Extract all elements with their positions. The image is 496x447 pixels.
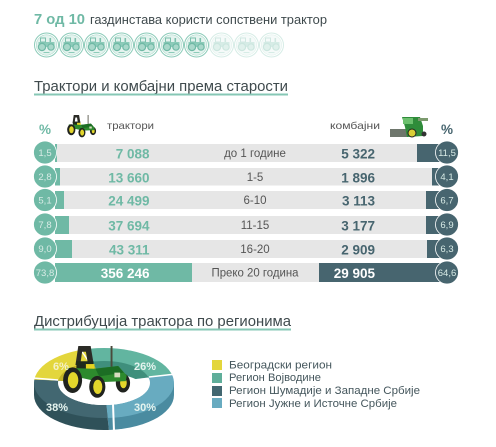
row: up to 1 year: 1,5	[38, 148, 52, 159]
row: up to 1 year: 5 322	[341, 146, 375, 162]
tractor illustration	[63, 346, 130, 398]
row: 6-10 years: 3 113	[342, 194, 375, 208]
row: 16-20 years	[34, 237, 458, 260]
row: 16-20 years: 2 909	[341, 242, 375, 258]
donut chart: regional shares: 26%	[134, 361, 156, 373]
row: over 20 years: 356 246	[101, 266, 150, 281]
row: 16-20 years: 6,3	[440, 244, 454, 255]
icon row: 10 tractor pictograms, 7 highlighted	[34, 33, 284, 57]
row: over 20 years: 64,6	[438, 268, 456, 279]
heading: tractors and combines by age: Трактори и комбајни према старости	[34, 78, 288, 95]
headline: 7 of 10 households: 7 од 10	[34, 12, 85, 28]
donut chart: regional shares: 38%	[46, 402, 68, 414]
row: 1-5 years	[34, 165, 458, 188]
row: 16-20 years: 9,0	[38, 244, 52, 255]
row: 1-5 years: 1-5	[247, 172, 263, 184]
row: up to 1 year: до 1 године	[224, 148, 286, 160]
legend: Регион Јужне и Источне Србије	[229, 398, 397, 410]
row: 1-5 years: 4,1	[440, 172, 454, 183]
row: 6-10 years	[34, 188, 458, 212]
row: 11-15 years	[34, 213, 458, 236]
row: 11-15 years: 37 694	[108, 218, 150, 234]
row: 6-10 years: 5,1	[38, 196, 52, 206]
row: 11-15 years: 7,8	[38, 220, 52, 231]
legend: Регион Војводине	[229, 372, 321, 384]
row: 11-15 years: 11-15	[241, 220, 269, 232]
row: 16-20 years: 43 311	[109, 242, 150, 258]
segment: Vojvodina 26%	[91, 348, 172, 379]
column header: tractors	[39, 115, 154, 137]
column header: combines: %	[441, 122, 453, 137]
column header: tractors: %	[39, 122, 51, 137]
donut chart: regional shares: 6%	[53, 361, 69, 373]
legend: Регион Шумадије и Западне Србије	[229, 385, 420, 397]
donut chart: regional shares	[33, 346, 176, 431]
legend	[212, 360, 420, 410]
row: over 20 years: 73,8	[36, 268, 54, 279]
row: up to 1 year: 11,5	[438, 148, 456, 159]
row: over 20 years: Преко 20 година	[212, 268, 299, 280]
row: over 20 years	[34, 261, 458, 284]
row: 11-15 years: 3 177	[341, 218, 375, 234]
headline: 7 of 10 households: газдинстава користи сопствени трактор	[90, 12, 327, 27]
segment: Sumadija and West 38%	[34, 380, 109, 430]
segment: Belgrade 6%	[34, 350, 96, 381]
segment: South and East 30%	[106, 375, 174, 430]
row: 1-5 years: 13 660	[108, 170, 150, 186]
row: up to 1 year	[34, 141, 458, 164]
row: up to 1 year: 7 088	[116, 146, 150, 162]
row: 16-20 years: 16-20	[240, 244, 270, 256]
column header: tractors: трактори	[107, 120, 154, 132]
column header: combines: комбајни	[330, 120, 380, 132]
heading: tractor distribution by region: Дистрибуција трактора по регионима	[34, 313, 292, 330]
row: 11-15 years: 6,9	[440, 220, 454, 231]
row: 6-10 years: 24 499	[108, 194, 150, 208]
donut chart: regional shares: 30%	[134, 402, 156, 414]
row: over 20 years: 29 905	[334, 266, 375, 281]
row: 6-10 years: 6-10	[243, 195, 267, 207]
column header: combines	[330, 117, 453, 137]
row: 1-5 years: 1 896	[341, 170, 375, 186]
row: 6-10 years: 6,7	[440, 196, 454, 206]
row: 1-5 years: 2,8	[38, 172, 52, 183]
legend: Београдски регион	[229, 360, 332, 372]
